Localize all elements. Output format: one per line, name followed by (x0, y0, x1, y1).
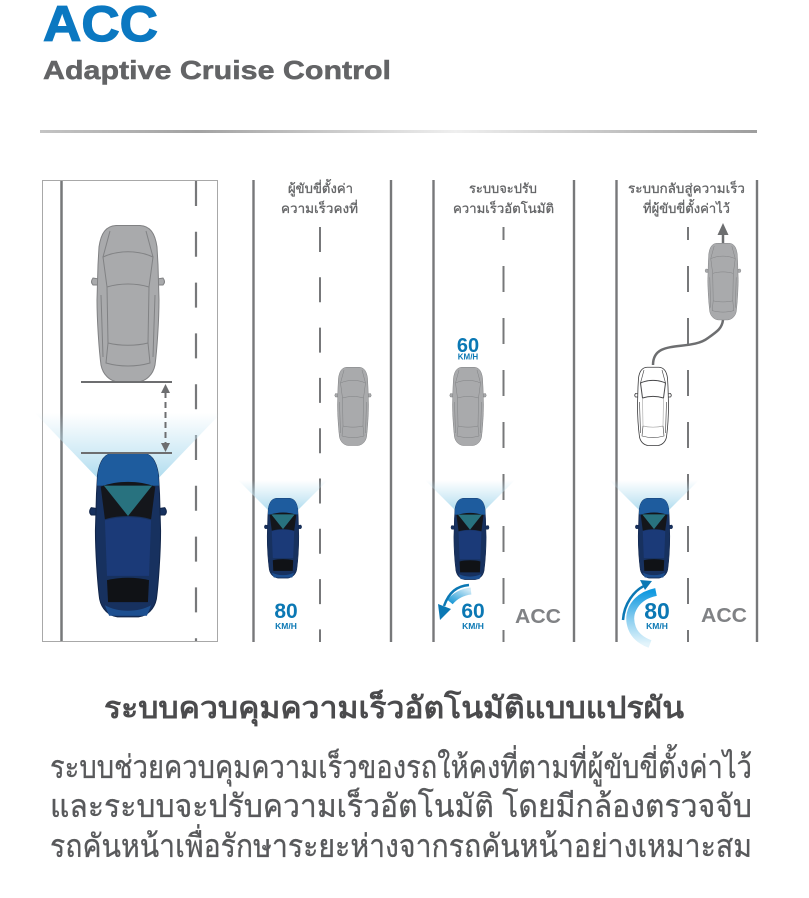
arrow: lead car moves away (718, 223, 728, 244)
icon: radar cone (609, 480, 699, 525)
label: ACC: ACC (515, 606, 561, 628)
panel: system returns to set speed (609, 179, 757, 644)
speed: 60 km/h: KM/H (462, 621, 484, 631)
label: ACC: ACC (701, 605, 747, 627)
label: returns to driver set speed (628, 179, 745, 217)
icon: blue car (264, 498, 302, 578)
label: driver sets constant speed: ผู้ขับขี่ตั้งค่า (288, 179, 353, 197)
label: returns to driver set speed: ที่ผู้ขับขี่ตั้งค่าไว้ (643, 199, 730, 217)
arrow: slowing down (438, 585, 471, 620)
panel: distance detail (35, 180, 221, 642)
icon: radar cone (35, 413, 221, 510)
label: returns to driver set speed: ระบบกลับสู่ความเร็ว (628, 179, 745, 197)
speed: 80 km/h: KM/H (646, 621, 668, 631)
icon: radar cone (425, 480, 515, 525)
arrow: accelerating (623, 580, 656, 644)
label: system adjusts speed automatically: ระบบจะปรับ (469, 181, 537, 196)
speed: 80 km/h: 80 (644, 598, 670, 624)
heading: Thai system name: ระบบควบคุมความเร็วอัตโนมัติแบบแปรผัน (104, 689, 685, 727)
panel: system adjusts speed (425, 180, 574, 642)
speed: lead car 60 km/h: 60 (457, 335, 479, 357)
gap marker lines (81, 382, 172, 453)
text block: description (50, 744, 752, 864)
speed: lead car 60 km/h: KM/H (458, 352, 478, 362)
icon: own car blue (90, 453, 166, 617)
subtitle: Adaptive Cruise Control: Adaptive Cruise Control (43, 55, 391, 85)
speed: 80 km/h: 80 (274, 600, 298, 623)
arrow: following distance (161, 384, 170, 452)
label: system adjusts speed automatically (453, 181, 554, 216)
arrow: lane change path (653, 320, 723, 365)
icon: gray car (450, 367, 486, 446)
icon: radar cone (238, 480, 328, 525)
icon: lead car gray (92, 226, 164, 382)
speed: 80 km/h: KM/H (275, 621, 297, 631)
icon: gray car (335, 367, 371, 446)
label: system adjusts speed automatically: ความเร็วอัตโนมัติ (453, 199, 554, 216)
icon: blue car (451, 498, 489, 580)
icon: blue car (635, 498, 673, 578)
text block: description: และระบบจะปรับความเร็วอัตโนมัติ โดยมีกล้องตรวจจับ (50, 787, 752, 824)
label: driver sets constant speed (281, 179, 358, 216)
panel: driver sets speed (238, 179, 391, 642)
speed: 60 km/h: 60 (461, 600, 485, 623)
label: driver sets constant speed: ความเร็วคงที่ (281, 199, 358, 216)
icon: gray car (705, 243, 741, 320)
header divider (40, 130, 757, 133)
icon: white car outline (635, 367, 671, 446)
